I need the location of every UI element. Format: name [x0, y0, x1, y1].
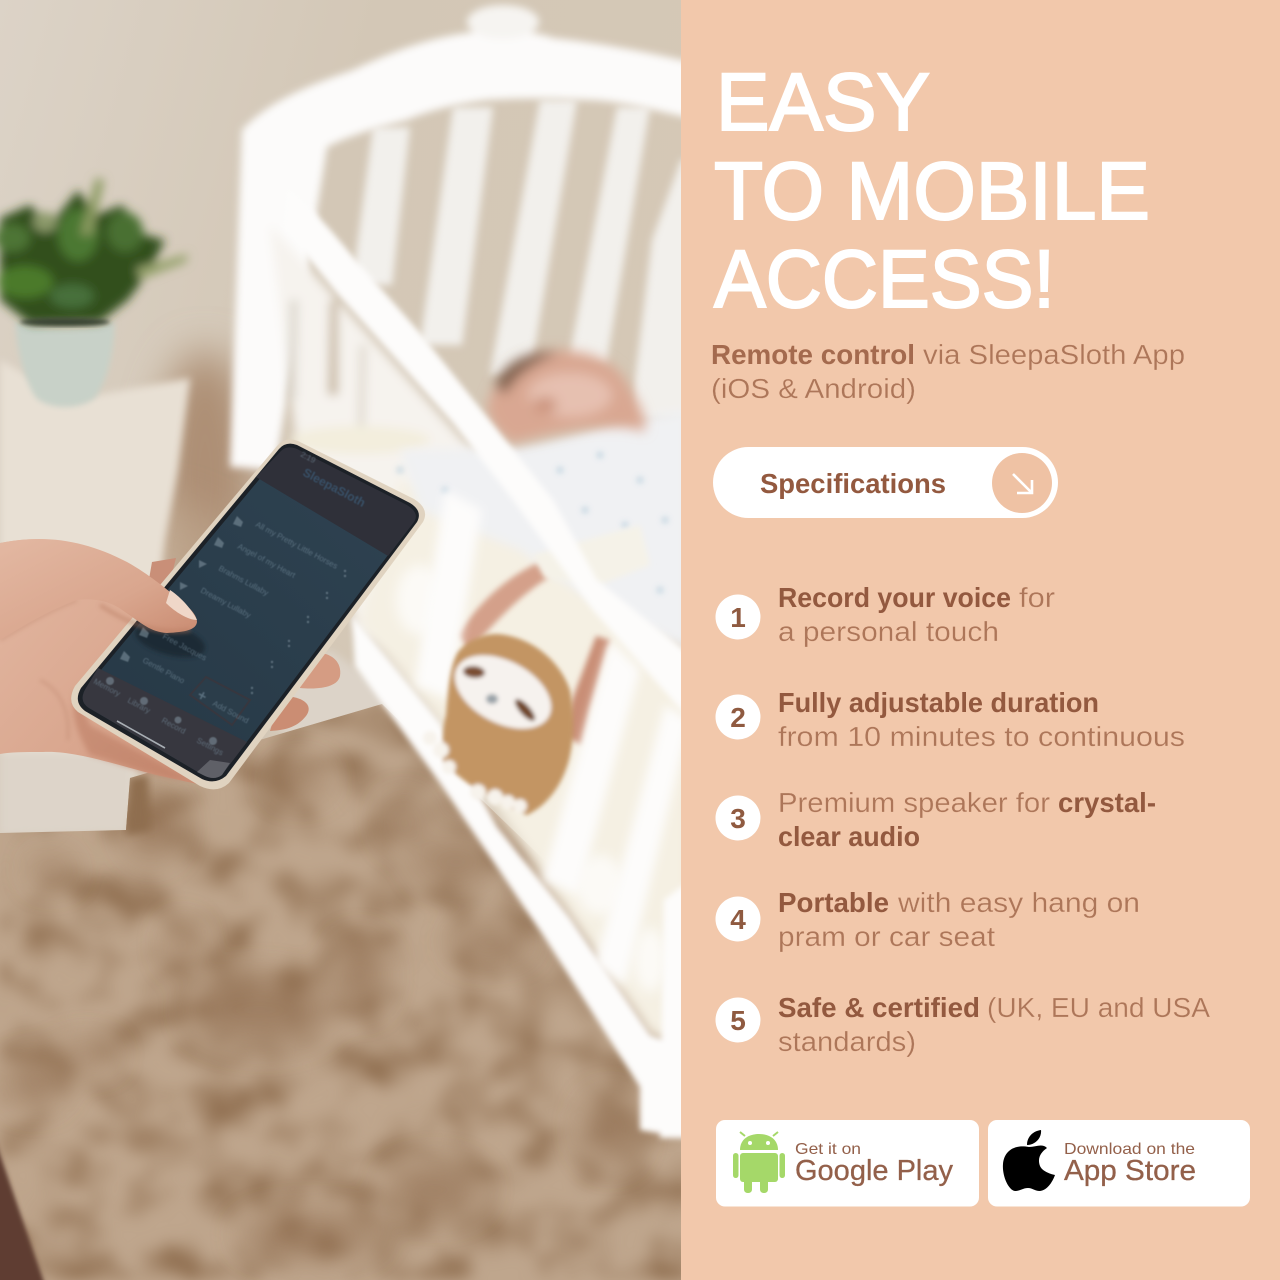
thumb over phone	[0, 539, 197, 640]
screen app content: Gentle Piano	[141, 656, 187, 686]
subtitle: (iOS & Android)	[711, 373, 916, 404]
feature 4	[716, 887, 1140, 952]
phone bottom navigation bar	[83, 668, 247, 777]
carpet edge shadow	[126, 775, 150, 835]
feature 3: Premium speaker for	[778, 787, 1050, 818]
dark wooden floor corner	[0, 1140, 45, 1280]
screen app content: All my Pretty Little Horses	[254, 520, 339, 571]
sloth toy	[423, 634, 573, 815]
crib near side infill	[275, 240, 471, 638]
smartphone	[71, 439, 425, 789]
phone screen bezel	[78, 444, 419, 781]
Google Play badge: Get it on	[795, 1141, 861, 1158]
title: EASY	[716, 57, 930, 148]
crib knob	[467, 5, 539, 39]
feature 4: with easy hang on	[897, 887, 1140, 918]
blanket fold over rail	[534, 528, 646, 580]
feature 1	[716, 582, 1055, 647]
icon: android robot	[733, 1132, 785, 1193]
title: ACCESS!	[714, 234, 1055, 325]
subtitle	[711, 339, 1185, 404]
screen app content: Free Jacques	[161, 632, 208, 663]
carpet floor	[0, 700, 690, 1280]
plant leaves	[0, 178, 188, 324]
feature 4: Portable	[778, 887, 889, 918]
panel: right text column	[681, 0, 1280, 1280]
feature 3	[716, 787, 1156, 852]
feature 1: for	[1019, 582, 1055, 613]
feature 5: Safe & certified	[778, 992, 980, 1023]
feature 3: 3	[730, 803, 746, 834]
screen app content: +	[194, 687, 210, 706]
feature 4: 4	[730, 904, 746, 935]
plant pot	[15, 322, 115, 407]
crib lower rail and foot	[352, 615, 690, 1138]
screen glare corner	[197, 760, 230, 778]
feature 3: clear audio	[778, 821, 920, 852]
hand holding phone (fingers and palm)	[0, 539, 340, 788]
screen app content: 2:19	[299, 450, 318, 465]
baby	[396, 350, 690, 745]
screen app content	[92, 450, 368, 757]
screen app content: Dreamy Lullaby	[199, 586, 252, 620]
sloth face	[451, 652, 555, 732]
list icons	[106, 516, 346, 745]
crib	[230, 5, 690, 1138]
App Store badge	[988, 1120, 1250, 1206]
screen app content: Record	[160, 716, 187, 736]
panel background	[681, 0, 1280, 1280]
feature 5: 5	[730, 1005, 746, 1036]
subtitle: via SleepaSloth App	[923, 339, 1185, 370]
palm shading	[73, 690, 190, 780]
screen app content: SleepaSloth	[301, 465, 368, 510]
photo: parent holding phone beside crib	[0, 0, 690, 1280]
title: TO MOBILE	[714, 146, 1150, 237]
Google Play badge: Google Play	[795, 1155, 953, 1187]
feature 5: standards)	[778, 1026, 916, 1057]
crib mattress	[360, 480, 690, 1045]
feature 5: (UK, EU and USA	[987, 992, 1210, 1023]
icon: apple logo	[1003, 1130, 1055, 1191]
feature 2: 2	[730, 702, 746, 733]
baby blanket	[414, 414, 681, 648]
carpet dark patches	[7, 764, 636, 1257]
thumb nail	[166, 590, 197, 620]
screen app content: Add Sound	[211, 699, 250, 725]
screen app content: Angel of my Heart	[236, 542, 298, 580]
crib side rail	[306, 212, 681, 710]
screen app content: Memory	[92, 677, 122, 698]
feature 2: Fully adjustable duration	[778, 687, 1099, 718]
feature 5	[716, 992, 1210, 1057]
title	[714, 57, 1150, 325]
phone frame	[71, 439, 425, 789]
sloth body	[443, 634, 573, 815]
phone screen	[83, 452, 415, 777]
specifications button	[713, 447, 1058, 518]
potted plant	[0, 178, 188, 407]
crib near slats	[415, 490, 690, 985]
screen app content: Brahms Lullaby	[217, 564, 270, 598]
crib far slats	[352, 100, 690, 420]
feature 1: 1	[730, 602, 746, 633]
feature 2: from 10 minutes to continuous	[778, 721, 1185, 752]
screen app content: Settings	[195, 736, 225, 757]
thumb shadow on screen	[131, 616, 209, 664]
add sound button	[190, 677, 250, 725]
thumb shading	[100, 605, 190, 631]
feature 4: pram or car seat	[778, 921, 995, 952]
feature 2	[716, 687, 1185, 752]
specifications button: Specifications	[760, 468, 946, 499]
icon: arrow in circle	[992, 453, 1052, 513]
App Store badge: Download on the	[1064, 1141, 1195, 1158]
feature 3: crystal-	[1058, 787, 1156, 818]
phone header bar	[256, 447, 416, 556]
subtitle: Remote control	[711, 339, 915, 370]
side table	[0, 360, 400, 835]
feature 1: Record your voice	[778, 582, 1011, 613]
wall background	[0, 0, 681, 860]
App Store badge: App Store	[1064, 1155, 1196, 1187]
baby head	[487, 350, 645, 443]
phone home indicator	[117, 721, 165, 748]
crib headboard rail	[230, 5, 690, 470]
baby arm	[458, 562, 610, 745]
Google Play badge	[716, 1120, 979, 1206]
sloth claws	[423, 731, 527, 813]
screen app content: Library	[126, 696, 152, 715]
feature 1: a personal touch	[778, 616, 999, 647]
